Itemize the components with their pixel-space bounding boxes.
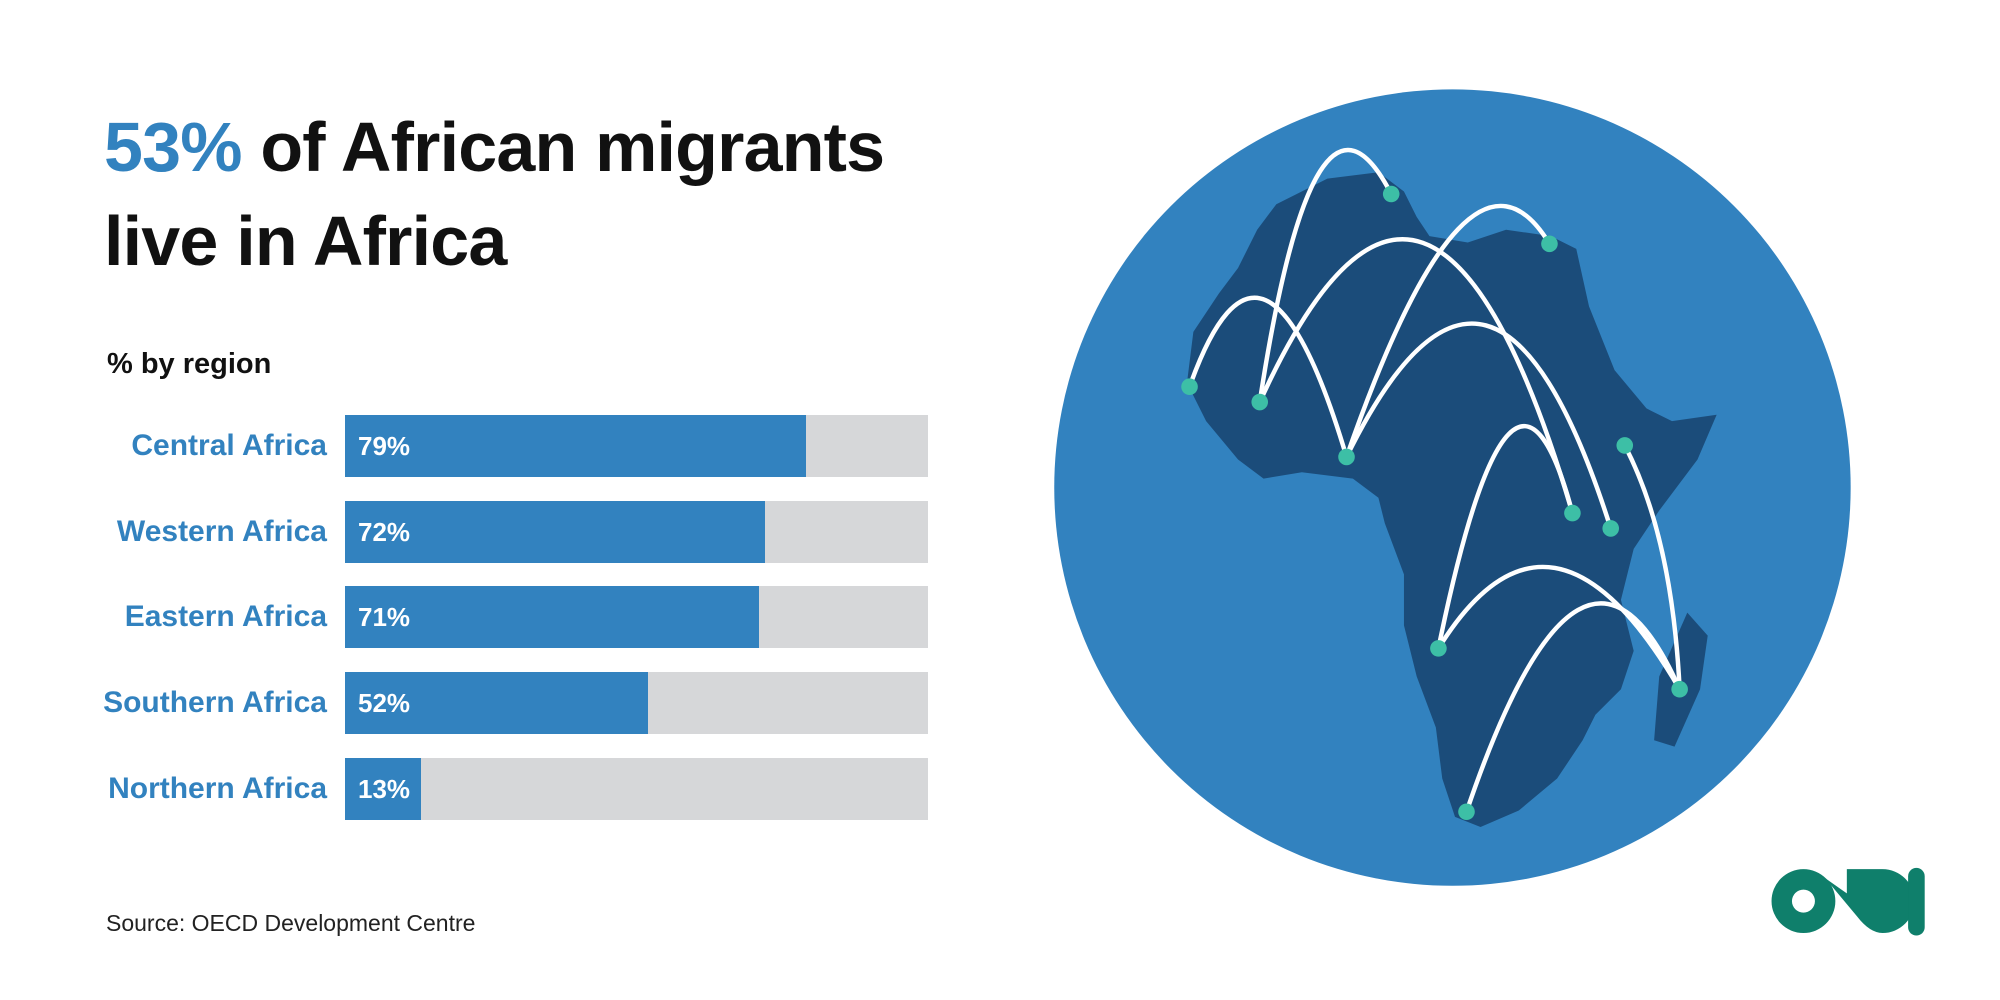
title bbox=[104, 108, 884, 280]
bar: Northern Africa: Northern Africa bbox=[108, 772, 327, 805]
bar: Southern Africa bbox=[103, 672, 928, 734]
map globe bbox=[1054, 89, 1851, 886]
bar: Eastern Africa: 71% bbox=[358, 602, 410, 632]
source: Source: OECD Development Centre bbox=[106, 910, 475, 936]
bar: Eastern Africa: Eastern Africa bbox=[125, 600, 327, 633]
migration arcs bbox=[1190, 150, 1680, 812]
bar: Central Africa bbox=[131, 415, 928, 477]
bar: Central Africa: 79% bbox=[358, 431, 410, 461]
bar chart bbox=[103, 415, 928, 820]
subtitle: % by region bbox=[107, 348, 271, 380]
title: live in Africa bbox=[104, 202, 506, 280]
africa map bbox=[1187, 172, 1717, 827]
city dots bbox=[1181, 186, 1688, 820]
madagascar bbox=[1654, 613, 1708, 747]
bar: Western Africa: 72% bbox=[358, 517, 410, 547]
bar: Western Africa bbox=[116, 501, 928, 563]
logo: ODI bbox=[1772, 868, 1925, 936]
title: 53% of African migrants bbox=[104, 108, 884, 186]
bar: Central Africa: Central Africa bbox=[131, 429, 327, 462]
bar: Southern Africa: Southern Africa bbox=[103, 686, 327, 719]
bar: Eastern Africa bbox=[125, 586, 928, 648]
bar: Western Africa: Western Africa bbox=[117, 515, 327, 548]
bar: Southern Africa: 52% bbox=[358, 688, 410, 718]
bar: Northern Africa: 13% bbox=[358, 774, 410, 804]
bar: Northern Africa bbox=[108, 758, 928, 820]
